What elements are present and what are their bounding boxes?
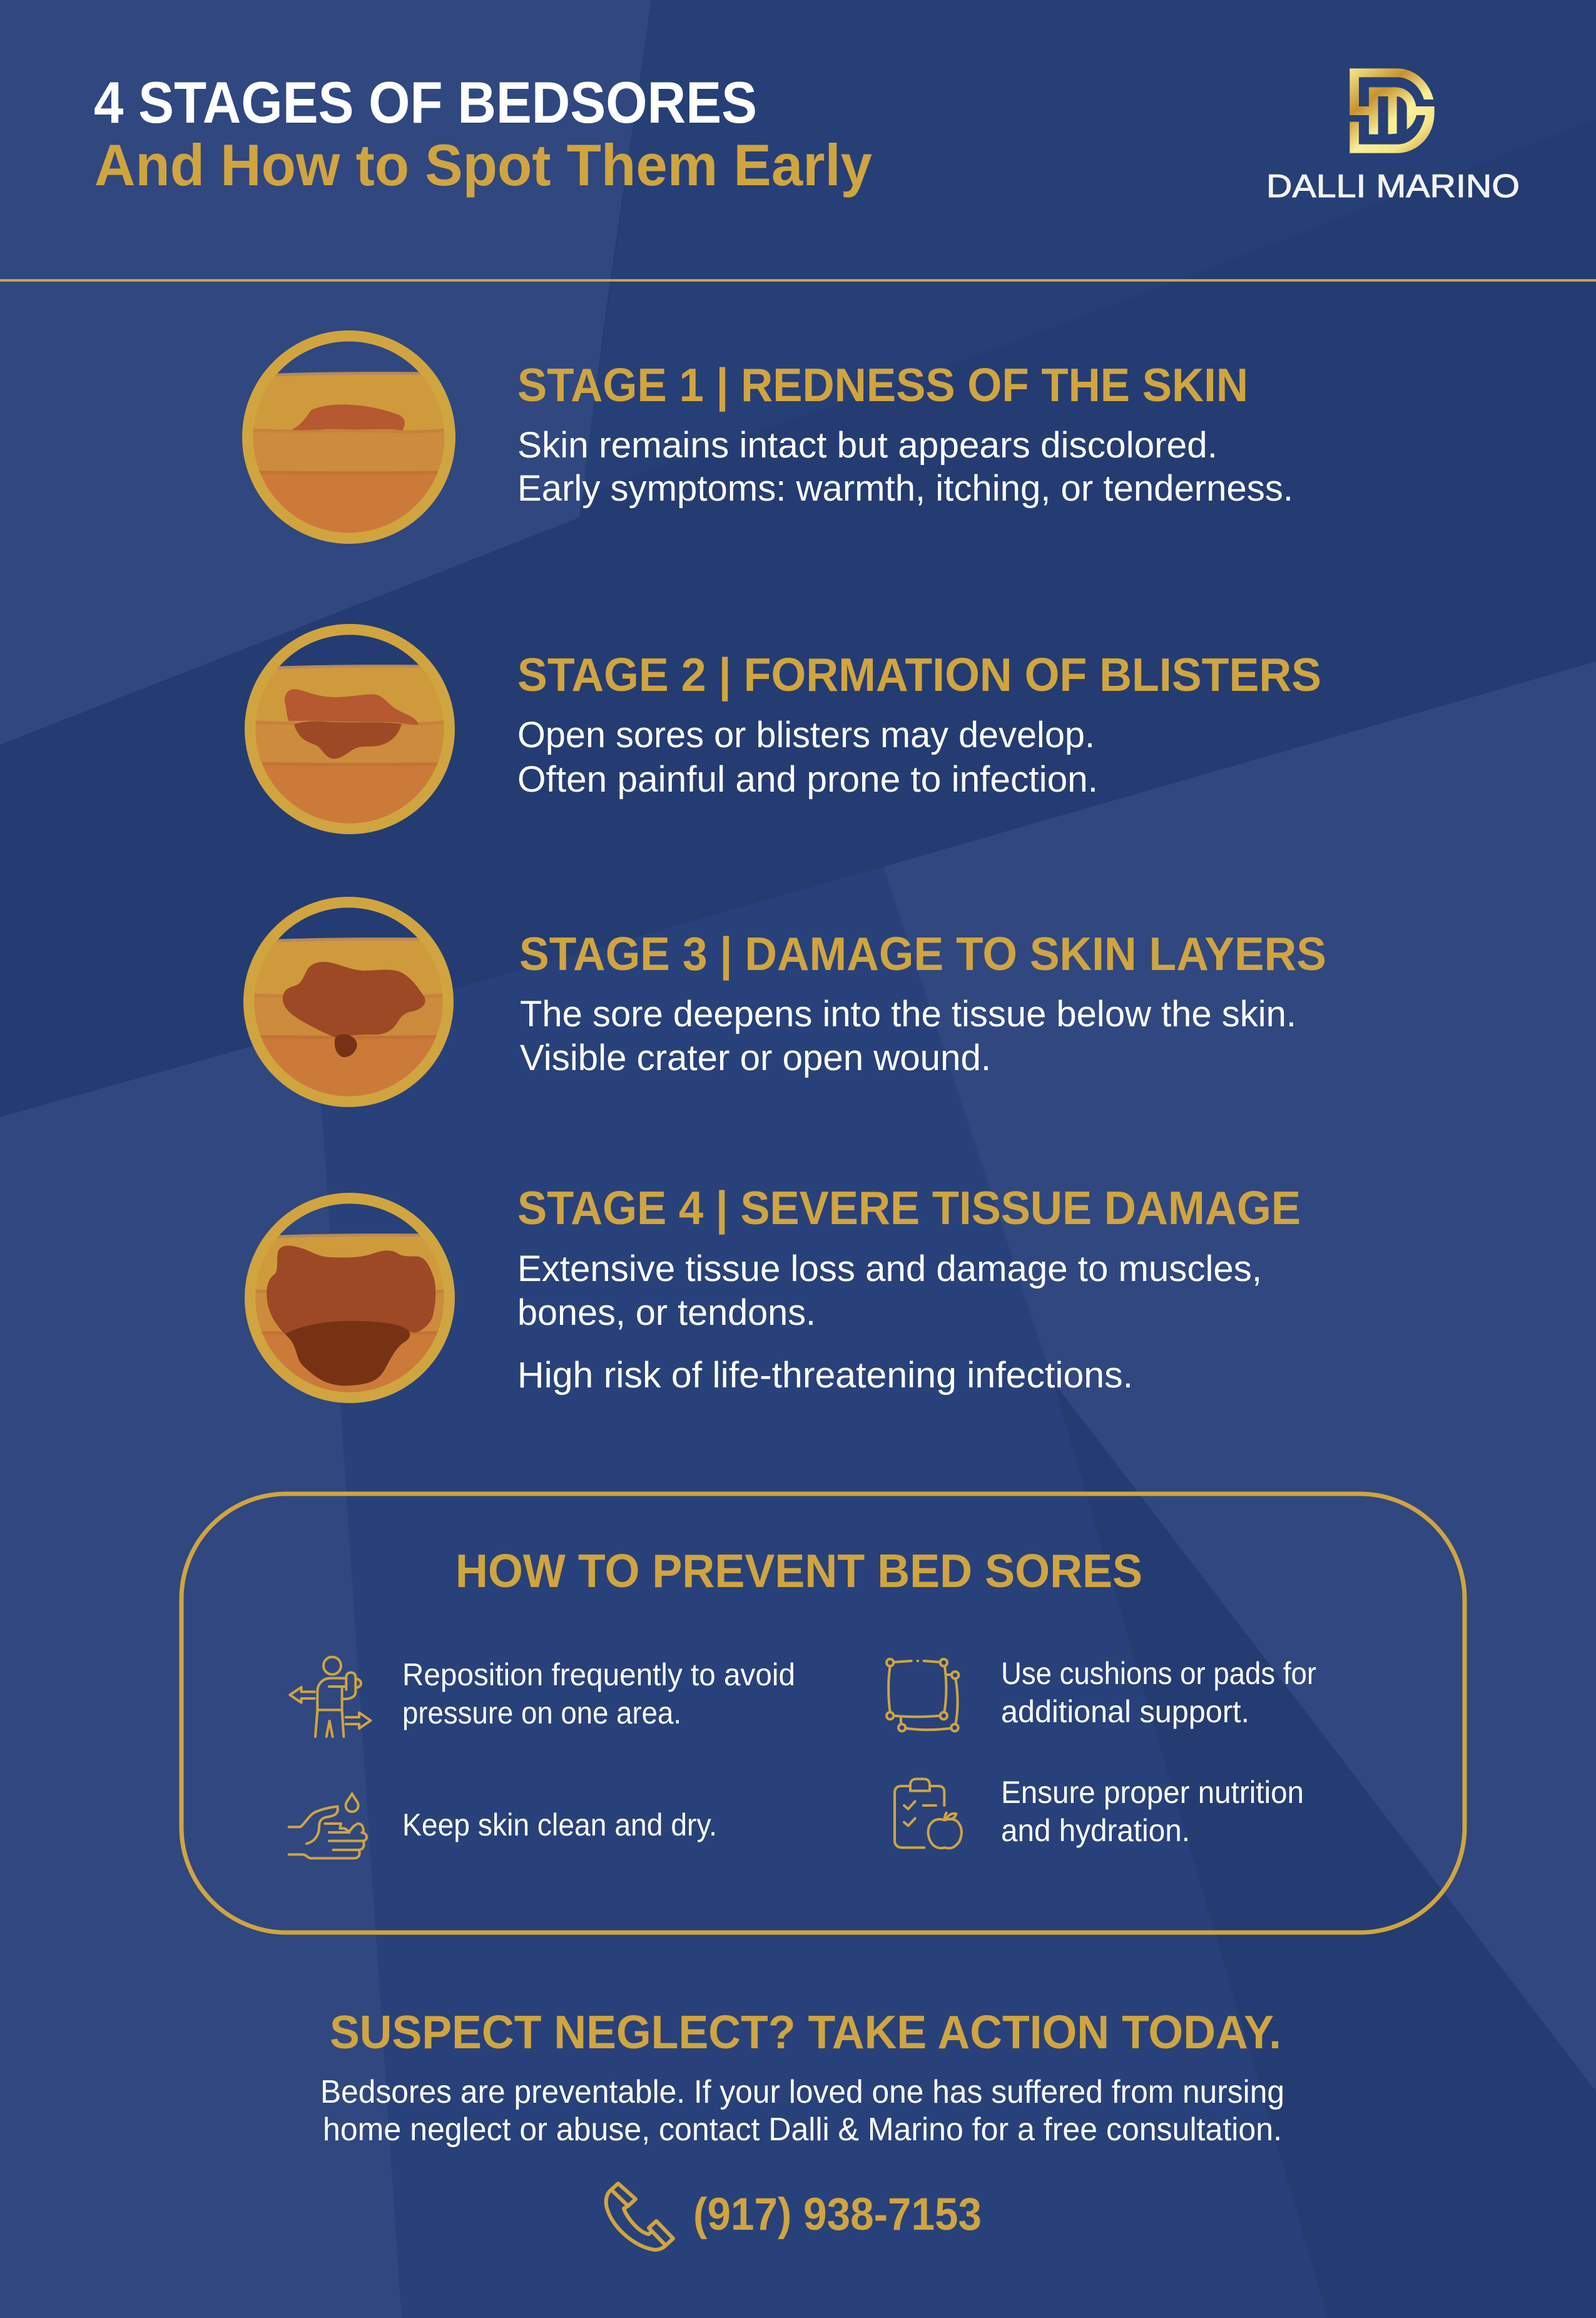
prevention heading: HOW TO PREVENT BED SORES xyxy=(455,1544,1142,1597)
stage 4 illustration xyxy=(250,1198,449,1397)
phone number: (917) 938-7153 xyxy=(693,2189,982,2240)
stage 4 description xyxy=(517,1248,1262,1396)
icon: pillows xyxy=(887,1659,958,1731)
logo mark xyxy=(1349,68,1435,153)
icon: person repositioning xyxy=(290,1657,370,1737)
stage 2 description xyxy=(517,715,1098,800)
header title: And How to Spot Them Early xyxy=(94,132,872,198)
stage 1 description xyxy=(517,425,1293,509)
stage 2 illustration xyxy=(250,630,449,829)
tip: nutrition xyxy=(1001,1775,1304,1848)
stage 2 description: Open sores or blisters may develop. xyxy=(517,715,1095,755)
icon: washing hand xyxy=(289,1794,367,1858)
stage 3 description: Visible crater or open wound. xyxy=(520,1038,991,1078)
tip: cushions: Use cushions or pads for xyxy=(1001,1656,1316,1691)
call to action body: Bedsores are preventable. If your loved one has suffered from nursing xyxy=(320,2074,1284,2110)
stage 1 xyxy=(248,336,1293,538)
stage 1 description: Skin remains intact but appears discolored. xyxy=(517,425,1217,466)
tip: cushions xyxy=(1001,1656,1316,1729)
logo: Dalli Marino: DALLI MARINO xyxy=(1266,168,1520,205)
stage 3 illustration xyxy=(249,902,448,1101)
tip: cushions: additional support. xyxy=(1001,1694,1249,1729)
call to action body xyxy=(320,2074,1284,2148)
stage 3 xyxy=(249,902,1326,1101)
call to action body: home neglect or abuse, contact Dalli & Marino for a free consultation. xyxy=(323,2111,1282,2148)
tip: nutrition: Ensure proper nutrition xyxy=(1001,1775,1304,1810)
call to action heading: SUSPECT NEGLECT? TAKE ACTION TODAY. xyxy=(330,2006,1281,2058)
stage 4 heading: STAGE 4 | SEVERE TISSUE DAMAGE xyxy=(517,1182,1301,1235)
stage 4 xyxy=(250,1182,1301,1397)
icon: telephone xyxy=(606,2183,673,2250)
stage 2 xyxy=(250,630,1321,829)
logo: Dalli Marino xyxy=(1266,68,1520,205)
header title xyxy=(94,69,872,198)
tip: reposition: pressure on one area. xyxy=(402,1695,681,1730)
icon: clipboard and apple xyxy=(895,1779,962,1848)
tip: reposition: Reposition frequently to avoid xyxy=(402,1657,795,1692)
header title: 4 STAGES OF BEDSORES xyxy=(94,69,757,135)
stage 4 description: High risk of life-threatening infections. xyxy=(517,1355,1133,1396)
stage 3 description: The sore deepens into the tissue below the skin. xyxy=(520,994,1296,1034)
stage 2 heading: STAGE 2 | FORMATION OF BLISTERS xyxy=(517,648,1321,702)
stage 4 description: bones, or tendons. xyxy=(517,1292,816,1333)
stage 3 heading: STAGE 3 | DAMAGE TO SKIN LAYERS xyxy=(519,927,1326,981)
stage 3 description xyxy=(520,994,1296,1078)
stage 1 illustration xyxy=(248,336,450,538)
tip: reposition xyxy=(402,1657,795,1730)
panel: how to prevent bed sores xyxy=(181,1494,1465,1933)
stage 1 description: Early symptoms: warmth, itching, or tenderness. xyxy=(517,468,1293,509)
tip: clean skin: Keep skin clean and dry. xyxy=(402,1807,717,1842)
stage 2 description: Often painful and prone to infection. xyxy=(517,759,1098,800)
tip: nutrition: and hydration. xyxy=(1001,1813,1190,1848)
stage 4 description: Extensive tissue loss and damage to muscles, xyxy=(517,1248,1262,1289)
stage 1 heading: STAGE 1 | REDNESS OF THE SKIN xyxy=(517,359,1248,412)
